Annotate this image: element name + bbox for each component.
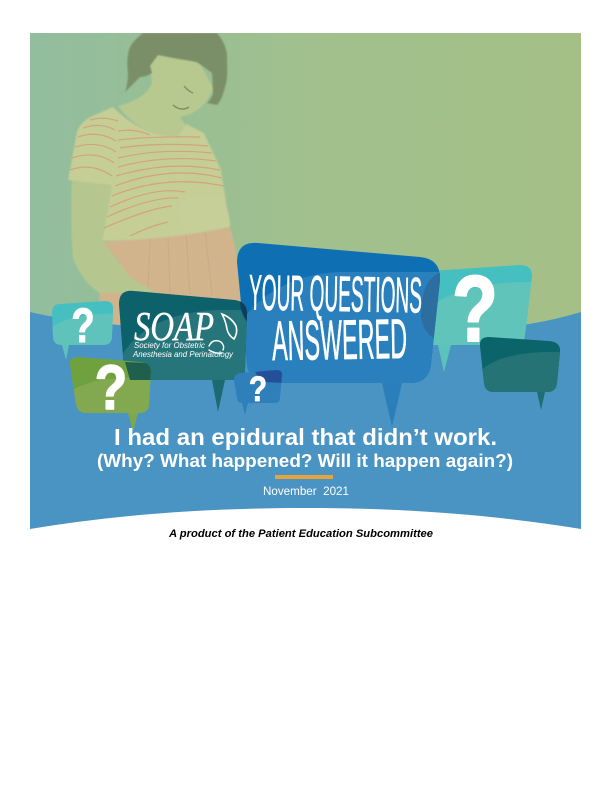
skirt (96, 227, 240, 330)
question mark: ? (95, 353, 127, 423)
overlap with teal bubble (421, 272, 441, 340)
green question bubble (70, 357, 151, 432)
hand on belly (227, 211, 230, 226)
small blue question bubble (234, 370, 282, 414)
headline: I had an epidural that didn’t work. (114, 424, 497, 450)
SOAP wordmark: Society for Obstetric (134, 340, 206, 350)
blue lower panel with curved edges (30, 312, 581, 529)
question mark: ? (71, 300, 95, 353)
SOAP wordmark: Anesthesia and Perinatology (132, 349, 234, 359)
orange divider (275, 475, 333, 479)
dark teal bubble (480, 337, 560, 410)
infographic cover (30, 33, 581, 540)
question mark: ? (452, 257, 498, 362)
main blue bubble: ANSWERED (271, 307, 408, 372)
large teal question bubble (433, 265, 532, 372)
photo: pregnant woman (68, 33, 240, 330)
overlap with SOAP bubble (125, 362, 152, 380)
small teal question bubble (52, 301, 114, 360)
shirt stripes (70, 118, 224, 236)
title: your questions answered (249, 265, 422, 372)
SOAP wordmark: SOAP (134, 303, 214, 349)
shirt (68, 107, 230, 241)
subheading: (Why? What happened? Will it happen again?) (97, 450, 513, 471)
arm (71, 176, 155, 293)
skirt pleats (148, 230, 212, 295)
footer credit: A product of the Patient Education Subcommittee (168, 528, 433, 540)
SOAP logo bubble (115, 286, 251, 412)
hair (125, 33, 227, 105)
neck and face (118, 50, 213, 138)
logo icon: mother and baby (209, 314, 237, 353)
question mark: ? (249, 370, 267, 409)
face features (173, 86, 193, 109)
main blue bubble (230, 238, 445, 427)
date: November 2021 (263, 486, 349, 498)
photo background panel (30, 33, 581, 333)
